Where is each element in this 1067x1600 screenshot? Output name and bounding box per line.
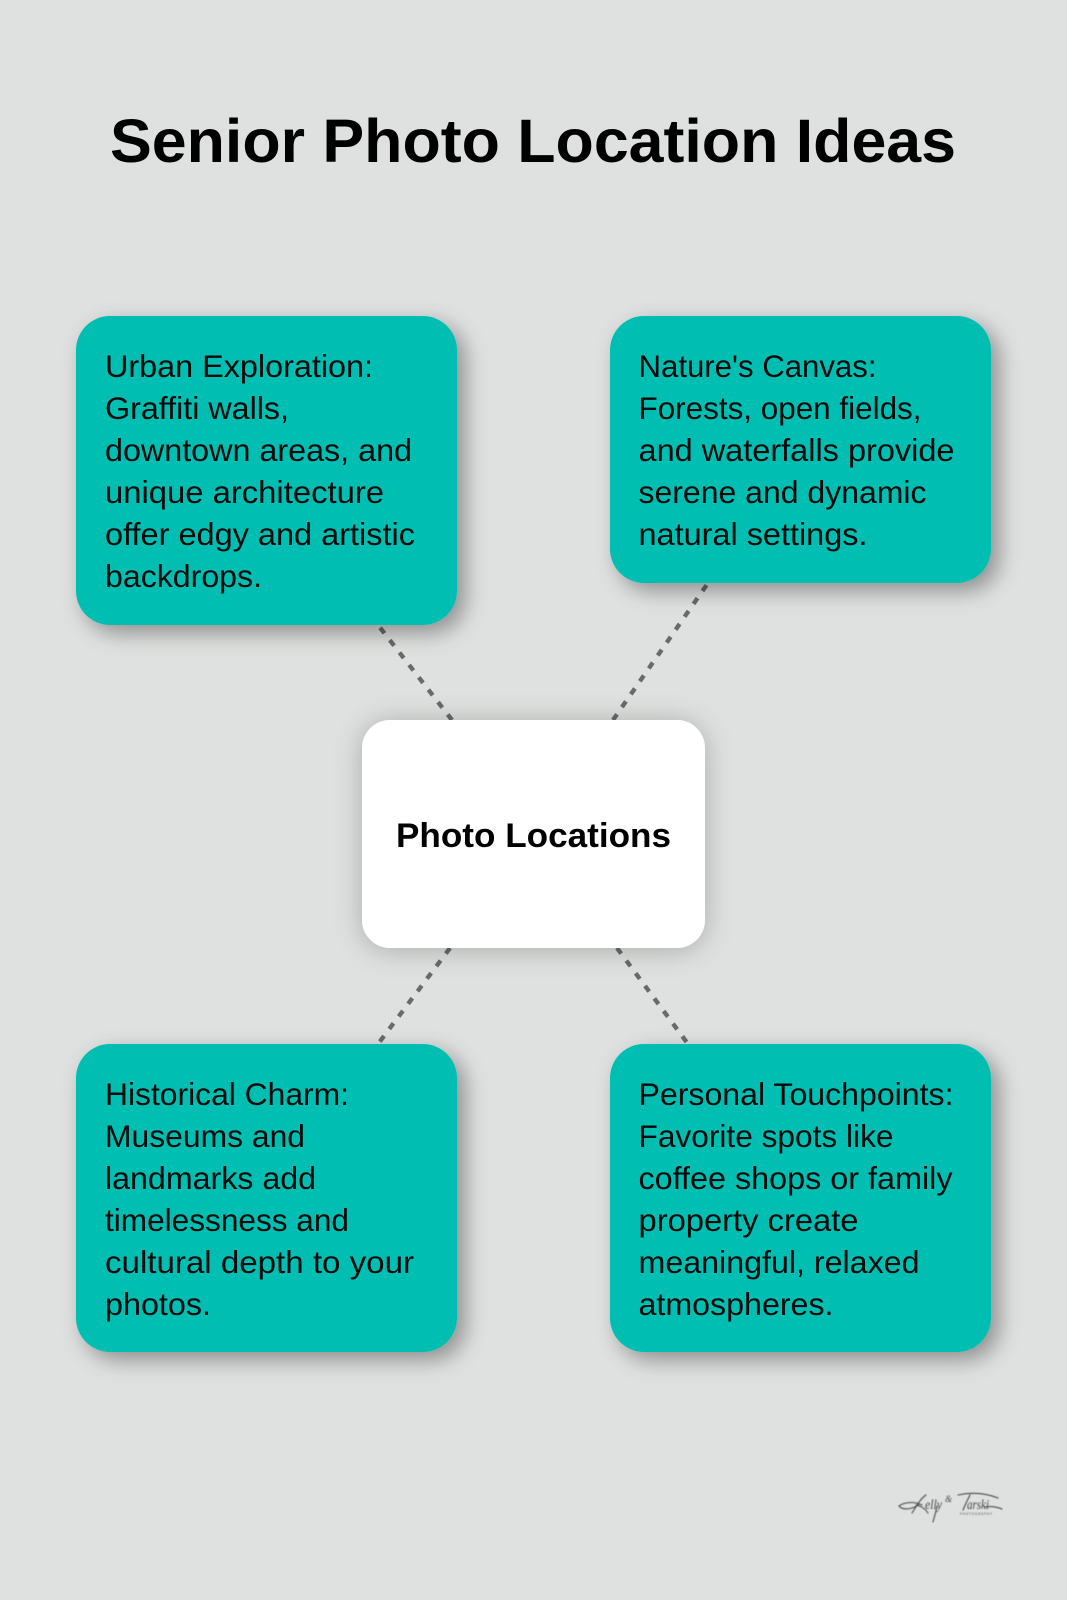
text: historical charm: landmarks add <box>105 1160 316 1196</box>
logo: signature: arski <box>967 1498 989 1513</box>
text: historical charm: Museums and <box>105 1118 305 1154</box>
text: personal touchpoints <box>638 1076 954 1322</box>
text: urban exploration <box>105 348 415 594</box>
panel: center photo locations <box>362 720 705 948</box>
text: urban exploration: downtown areas, and <box>105 432 412 468</box>
text: urban exploration: Graffiti walls, <box>105 390 289 426</box>
text: historical charm: photos. <box>105 1286 211 1322</box>
text: urban exploration: Urban Exploration: <box>105 348 373 384</box>
text: historical charm <box>105 1076 414 1322</box>
logo: signature: & <box>945 1494 952 1504</box>
logo: signature <box>899 1493 1002 1522</box>
text: personal touchpoints: atmospheres. <box>638 1286 834 1322</box>
text: personal touchpoints: Favorite spots like <box>638 1118 894 1154</box>
text: urban exploration: offer edgy and artistic <box>105 516 415 552</box>
text: personal touchpoints: Personal Touchpoints: <box>638 1076 954 1112</box>
text: historical charm: cultural depth to your <box>105 1244 414 1280</box>
logo: signature: elly <box>925 1498 943 1513</box>
title: Senior Photo Location Ideas <box>110 107 956 175</box>
text: nature's canvas: serene and dynamic <box>638 474 926 510</box>
connector: nature's canvas to center <box>613 583 708 720</box>
text: nature's canvas: natural settings. <box>638 516 868 552</box>
panel: urban exploration <box>76 316 457 625</box>
text: urban exploration: unique architecture <box>105 474 384 510</box>
panel: nature's canvas <box>610 316 991 583</box>
connector: urban exploration to center <box>378 625 452 720</box>
text: nature's canvas: Nature's Canvas: <box>638 348 876 384</box>
text: historical charm: Historical Charm: <box>105 1076 349 1112</box>
connector: historical charm to center <box>378 948 450 1044</box>
panel: historical charm <box>76 1044 457 1352</box>
text: personal touchpoints: coffee shops or family <box>638 1160 953 1196</box>
text: urban exploration: backdrops. <box>105 558 262 594</box>
panel: personal touchpoints <box>610 1044 991 1352</box>
text: nature's canvas: Forests, open fields, <box>638 390 922 426</box>
center label: Photo Locations <box>396 817 671 855</box>
connector: personal touchpoints to center <box>617 948 688 1044</box>
text: personal touchpoints: meaningful, relaxed <box>638 1244 920 1280</box>
text: personal touchpoints: property create <box>638 1202 858 1238</box>
text: nature's canvas: and waterfalls provide <box>638 432 954 468</box>
text: nature's canvas <box>638 348 954 552</box>
logo: signature: PHOTOGRAPHY <box>960 1512 993 1516</box>
text: historical charm: timelessness and <box>105 1202 349 1238</box>
